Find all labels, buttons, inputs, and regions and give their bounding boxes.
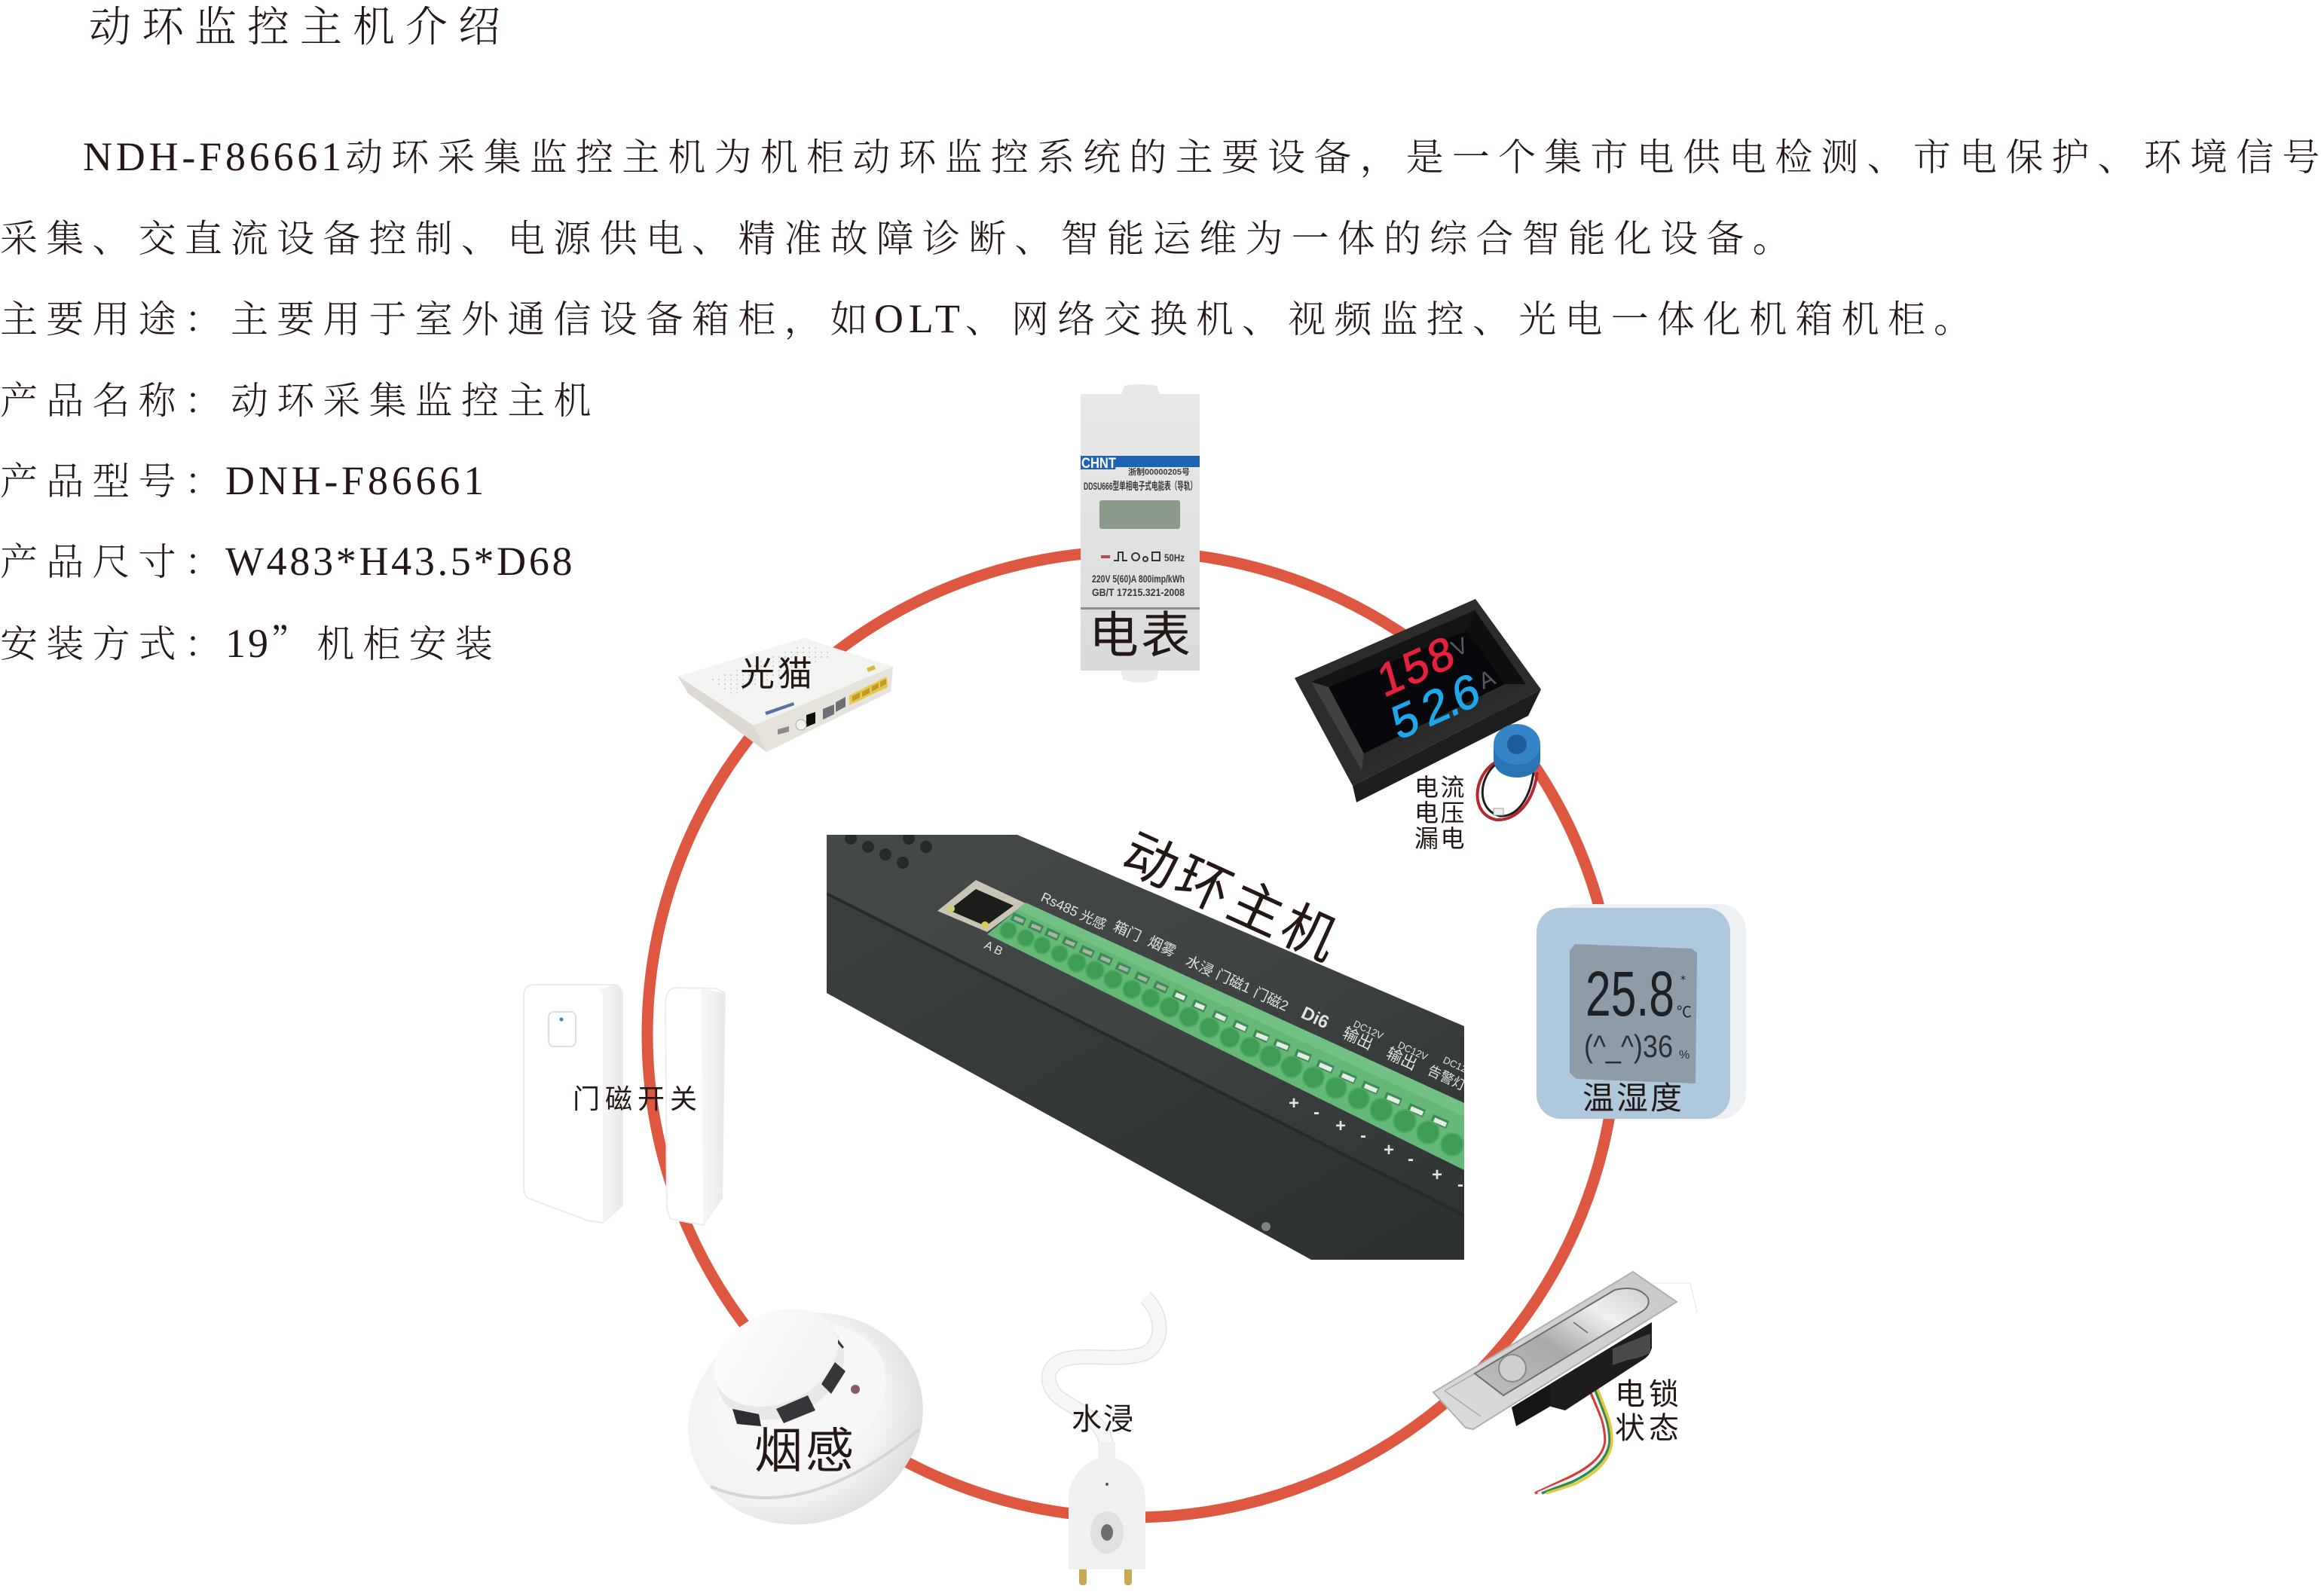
polarity marks: + xyxy=(1289,1093,1299,1114)
electric meter: 浙制00000205号 xyxy=(1128,466,1190,477)
terminal labels: 门磁1 xyxy=(1213,967,1253,997)
polarity marks: + xyxy=(1384,1140,1394,1160)
optical modem xyxy=(678,638,893,752)
terminal labels: A B xyxy=(982,939,1005,958)
product specifications xyxy=(0,380,600,668)
label: 电流 电压 漏电: 电压 xyxy=(1414,799,1466,827)
terminal labels: Rs485 光感 xyxy=(1038,889,1108,933)
terminal labels: 烟雾 xyxy=(1145,933,1179,961)
electric meter: GB/T 17215.321-2008 xyxy=(1092,586,1185,598)
electric meter xyxy=(1081,384,1200,683)
label: 电流 电压 漏电: 电流 xyxy=(1414,774,1466,801)
product specifications: 安装方式：19”机柜安装 xyxy=(0,614,501,668)
voltage and current meter: 52.6 xyxy=(1387,663,1485,751)
connection ring xyxy=(647,552,1616,1517)
polarity marks: + xyxy=(1335,1116,1346,1136)
label: 电流 电压 漏电 xyxy=(1414,774,1466,852)
polarity marks: - xyxy=(1408,1149,1414,1169)
polarity marks: - xyxy=(1457,1175,1463,1195)
intro text block: 采集、交直流设备控制、电源供电、精准故障诊断、智能运维为一体的综合智能化设备。 xyxy=(0,218,1799,260)
host unit photo xyxy=(827,833,1475,1260)
terminal labels: 水浸 xyxy=(1183,953,1216,980)
terminal labels: DC12V xyxy=(1352,1018,1385,1042)
terminal labels: 输出 xyxy=(1340,1025,1376,1053)
terminal labels: DC12V xyxy=(1442,1054,1475,1078)
polarity marks xyxy=(1289,1098,1463,1187)
product specifications: 产品尺寸：W483*H43.5*D68 xyxy=(0,539,575,584)
temperature and humidity sensor: 25.8 xyxy=(1586,958,1674,1029)
product specifications: 产品型号：DNH-F86661 xyxy=(0,458,488,503)
voltage and current meter xyxy=(1295,599,1541,852)
water leak sensor xyxy=(1049,1297,1160,1585)
terminal labels: 告警灯 xyxy=(1425,1062,1469,1093)
label: 电锁 状态 xyxy=(1615,1378,1683,1445)
meter digits: 158 xyxy=(1372,625,1461,707)
electric lock xyxy=(1433,1272,1697,1493)
electric meter: 50Hz xyxy=(1164,552,1185,564)
temperature and humidity sensor: (^_^)36 xyxy=(1584,1028,1673,1064)
polarity marks: - xyxy=(1313,1102,1319,1123)
label: 电流 电压 漏电: 漏电 xyxy=(1414,825,1466,852)
electric meter: 220V 5(60)A 800imp/kWh xyxy=(1092,573,1185,585)
current transformer xyxy=(1477,762,1537,820)
voltage and current meter: A xyxy=(1475,665,1499,694)
temperature and humidity sensor xyxy=(1537,904,1746,1119)
RJ45 port xyxy=(937,880,1026,932)
door magnetic switch xyxy=(524,985,725,1225)
host label: 动环主机 xyxy=(1113,823,1350,973)
temperature and humidity sensor: * xyxy=(1680,974,1686,986)
polarity marks: + xyxy=(1432,1165,1442,1185)
terminal labels: DC12V xyxy=(1396,1039,1430,1063)
label: 温湿度: 温湿度 xyxy=(1582,1080,1684,1116)
label: 水浸: 水浸 xyxy=(1072,1403,1135,1436)
product specifications: 产品名称：动环采集监控主机 xyxy=(0,380,600,422)
intro text block: NDH-F86661动环采集监控主机为机柜动环监控系统的主要设备，是一个集市电供电检测、市电保护、环境信号 xyxy=(83,134,2324,179)
title: 动环监控主机介绍 xyxy=(89,5,511,51)
electric meter: CHNT xyxy=(1081,456,1116,472)
terminal labels: 门磁2 xyxy=(1251,985,1291,1015)
green terminal block xyxy=(987,903,1464,1170)
smoke detector xyxy=(658,1280,953,1557)
terminal labels: Di6 xyxy=(1298,1003,1332,1033)
terminal labels xyxy=(982,889,1475,1093)
temperature and humidity sensor: ℃ xyxy=(1677,1004,1692,1021)
terminal labels: 箱门 xyxy=(1111,918,1144,946)
temperature and humidity sensor: % xyxy=(1679,1049,1689,1062)
label: 电表: 电表 xyxy=(1089,607,1193,663)
voltage and current meter: V xyxy=(1448,633,1472,662)
intro text block xyxy=(0,134,2324,341)
polarity marks: - xyxy=(1360,1126,1366,1146)
electric meter: DDSU666型单相电子式电能表（导轨） xyxy=(1084,480,1197,492)
status LEDs xyxy=(845,833,932,869)
lock wires xyxy=(1535,1382,1612,1493)
label: 光猫: 光猫 xyxy=(740,654,815,693)
label: 电锁 状态: 状态 xyxy=(1615,1412,1683,1445)
terminal labels: 输出 xyxy=(1384,1045,1420,1074)
label: 烟感: 烟感 xyxy=(754,1424,857,1478)
label: 电锁 状态: 电锁 xyxy=(1615,1378,1683,1411)
screw xyxy=(1261,1222,1271,1231)
intro text block: 主要用途：主要用于室外通信设备箱柜，如OLT、网络交换机、视频监控、光电一体化机箱机柜。 xyxy=(0,296,1980,341)
label: 门磁开关: 门磁开关 xyxy=(573,1083,702,1114)
